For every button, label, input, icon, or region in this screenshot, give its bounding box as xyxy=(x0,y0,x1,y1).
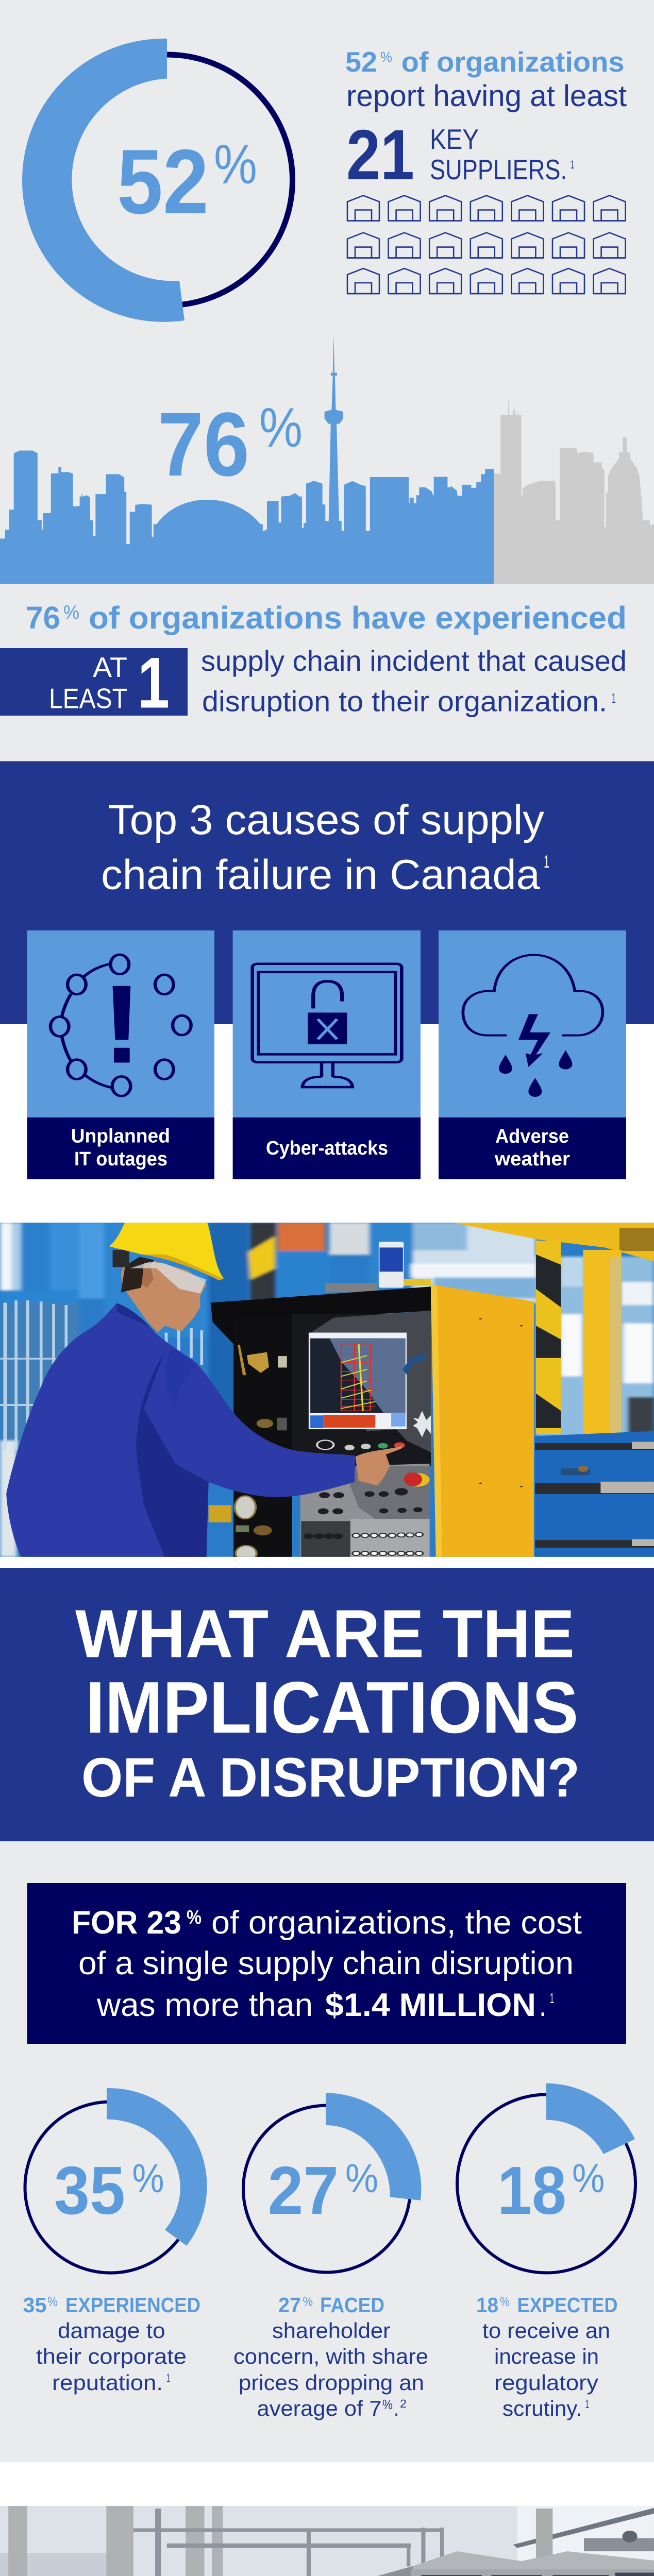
donut chart: 18 percent xyxy=(457,2083,635,2273)
text: 18 percent expected: regulatory xyxy=(494,2370,598,2395)
callout: 23 percent cost: . xyxy=(539,1987,546,2023)
card: cyber-attacks xyxy=(233,930,421,1179)
card: adverse weather: weather xyxy=(494,1148,570,1170)
text: 52 percent report 21 key suppliers xyxy=(345,46,627,195)
text: 18 percent expected: 18 xyxy=(476,2293,498,2317)
donut chart: 35 percent: 35 xyxy=(54,2153,125,2228)
text: 52 percent report 21 key suppliers: 1 xyxy=(571,158,574,171)
heading: top 3 causes: 1 xyxy=(544,852,549,872)
text: 52 percent report 21 key suppliers: % xyxy=(380,49,392,65)
card: unplanned IT outages xyxy=(27,930,214,1179)
card: unplanned IT outages: IT outages xyxy=(74,1148,167,1170)
text: 27 percent faced: concern, with share xyxy=(233,2344,428,2368)
text: 27 percent faced: % xyxy=(382,2397,393,2412)
donut chart: 35 percent: % xyxy=(132,2155,164,2201)
heading: top 3 causes: chain failure in Canada xyxy=(101,851,540,899)
donut chart: 52 percent: % xyxy=(214,133,257,195)
heading: top 3 causes: Top 3 causes of supply xyxy=(108,796,544,843)
text: 18 percent expected: to receive an xyxy=(482,2318,610,2343)
chart: Toronto skyline filled to 76 percent xyxy=(0,335,654,584)
icon: exclamation with nodes xyxy=(51,955,191,1096)
text: 27 percent faced: prices dropping an xyxy=(239,2370,424,2395)
callout: 23 percent cost: was more than xyxy=(96,1987,313,2023)
text: 27 percent faced: average of 7 xyxy=(257,2396,381,2420)
worker figure xyxy=(6,1220,403,1557)
text: 52 percent report 21 key suppliers: 52 xyxy=(345,46,377,78)
heading: top 3 causes xyxy=(101,796,549,899)
text: 27 percent faced: . xyxy=(394,2396,399,2420)
text: 18 percent expected: 1 xyxy=(585,2398,589,2411)
donut chart: 18 percent: 18 xyxy=(497,2153,566,2228)
panel: implications of a disruption heading: WHAT ARE THE xyxy=(75,1596,575,1671)
donut chart: 27 percent: % xyxy=(345,2155,378,2201)
text: 27 percent faced: % xyxy=(303,2294,313,2309)
callout: 23 percent cost: 1 xyxy=(550,1990,554,2006)
text: 27 percent faced: 27 xyxy=(278,2293,301,2317)
callout: at least 1: LEAST xyxy=(49,682,127,714)
callout: 23 percent cost: FOR 23 xyxy=(72,1905,181,1941)
icon: monitor with open padlock xyxy=(253,964,401,1087)
text: 18 percent expected: increase in xyxy=(494,2344,599,2368)
callout: 23 percent cost: of organizations, the cost xyxy=(211,1905,582,1941)
chart: Toronto skyline filled to 76 percent: % xyxy=(259,396,303,459)
text: 52 percent report 21 key suppliers: SUPPLIERS. xyxy=(430,154,567,185)
panel: cost of disruption statistics xyxy=(0,1841,654,2462)
text: 27 percent faced: 2 xyxy=(400,2397,407,2410)
icons: 21 warehouses xyxy=(347,196,626,294)
text: 76 percent have experienced: of organizations have experienced xyxy=(89,600,627,635)
text: supply chain incident: supply chain incident that caused xyxy=(201,645,627,677)
chart: Toronto skyline filled to 76 percent: 76 xyxy=(158,394,249,495)
text: 35 percent experienced: their corporate xyxy=(36,2344,187,2368)
callout: at least 1: AT xyxy=(93,651,127,683)
text: 27 percent faced: FACED xyxy=(320,2293,384,2317)
text: 52 percent report 21 key suppliers: report having at least xyxy=(346,79,627,113)
text: 35 percent experienced xyxy=(23,2293,200,2395)
text: 76 percent have experienced: 76 xyxy=(26,600,60,635)
panel: implications of a disruption heading xyxy=(0,1568,654,1841)
text: 18 percent expected: EXPECTED xyxy=(517,2293,617,2317)
donut chart: 18 percent: % xyxy=(572,2155,605,2201)
text: 35 percent experienced: % xyxy=(47,2294,58,2309)
icon: storm cloud xyxy=(463,955,602,1097)
text: 35 percent experienced: EXPERIENCED xyxy=(65,2293,200,2317)
panel: implications of a disruption heading: OF A DISRUPTION? xyxy=(81,1746,580,1808)
text: supply chain incident xyxy=(201,645,627,718)
text: supply chain incident: disruption to their organization. xyxy=(202,685,607,718)
photo: worker operating machine control panel xyxy=(0,1220,654,1561)
donut chart: 27 percent xyxy=(243,2093,421,2273)
text: 18 percent expected: scrutiny. xyxy=(502,2396,582,2420)
text: 52 percent report 21 key suppliers: KEY xyxy=(430,123,479,155)
text: 35 percent experienced: 35 xyxy=(23,2293,46,2317)
card: unplanned IT outages: Unplanned xyxy=(71,1125,170,1147)
panel: top 3 causes of failure xyxy=(0,761,654,1179)
text: 52 percent report 21 key suppliers: 21 xyxy=(346,115,414,195)
donut chart: 35 percent xyxy=(25,2088,207,2273)
donut chart: 52 percent: 52 xyxy=(117,130,209,233)
text: 27 percent faced xyxy=(233,2293,428,2420)
card: cyber-attacks: Cyber-attacks xyxy=(266,1138,388,1159)
text: supply chain incident: 1 xyxy=(612,690,616,706)
text: 35 percent experienced: damage to xyxy=(58,2318,165,2343)
donut chart: 52 percent xyxy=(22,39,292,322)
panel: implications of a disruption heading: IMPLICATIONS xyxy=(86,1667,578,1749)
card: adverse weather: Adverse xyxy=(495,1126,569,1147)
text: 52 percent report 21 key suppliers: of organizations xyxy=(401,46,625,78)
text: 18 percent expected: % xyxy=(500,2294,510,2309)
text: 35 percent experienced: reputation. xyxy=(52,2370,163,2395)
callout: at least 1 xyxy=(0,642,188,723)
callout: 23 percent cost: $1.4 MILLION xyxy=(325,1987,536,2023)
callout: 23 percent cost: % xyxy=(187,1907,202,1928)
callout: 23 percent cost xyxy=(27,1883,626,2044)
card: adverse weather xyxy=(439,930,626,1179)
text: 76 percent have experienced: % xyxy=(63,602,79,623)
panel: key suppliers statistic xyxy=(0,0,654,761)
text: 18 percent expected xyxy=(476,2293,617,2420)
text: 35 percent experienced: 1 xyxy=(166,2371,170,2384)
text: 27 percent faced: shareholder xyxy=(272,2318,391,2343)
photo: bottling conveyor line xyxy=(0,2506,654,2576)
callout: 23 percent cost: of a single supply chain disruption xyxy=(78,1945,574,1981)
donut chart: 27 percent: 27 xyxy=(268,2153,339,2228)
callout: at least 1: 1 xyxy=(138,642,170,723)
